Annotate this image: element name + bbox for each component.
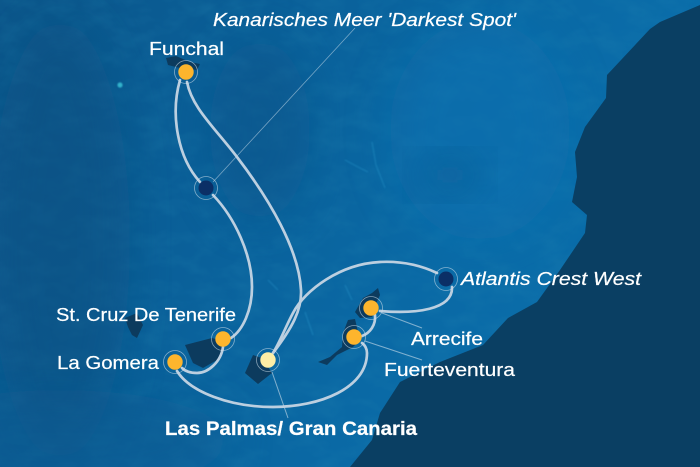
island: Fuerteventura [318,319,360,365]
island: Lanzarote [355,288,380,318]
guide line: Arrecife [382,313,422,328]
label: Atlantis Crest West: Atlantis Crest West [460,268,642,289]
guide line: Fuerteventura [365,341,422,360]
seamount highlights [268,142,385,335]
label: St. Cruz De Tenerife: St. Cruz De Tenerife [56,304,236,325]
label: Fuerteventura: Fuerteventura [384,359,516,380]
island: La Palma [125,313,143,338]
islands [125,56,380,384]
label: Las Palmas / Gran Canaria: Las Palmas/ Gran Canaria [165,419,417,440]
label: La Gomera: La Gomera [57,352,160,373]
landmass: African coast [350,5,700,467]
glow spot [117,82,123,88]
port marker: Las Palmas [256,348,280,372]
label: Kanarisches Meer: Kanarisches Meer 'Darkest Spot' [213,9,518,30]
label: Funchal: Funchal [149,38,224,59]
waypoint marker: Atlantis Crest West [434,268,458,290]
label: Arrecife: Arrecife [411,328,483,349]
island: Tenerife [185,338,226,368]
port marker: La Gomera [164,350,186,374]
guide line: Kanarisches Meer [213,28,355,182]
port marker: Fuerteventura [342,326,366,348]
guide line: Las Palmas [272,372,288,418]
waypoint marker: Kanarisches Meer [194,176,218,200]
island: Madeira [166,56,200,70]
cruise route [176,80,452,407]
island: Gran Canaria [245,355,272,384]
port marker: Arrecife [360,296,382,320]
port marker: Funchal [174,60,198,84]
port marker: St. Cruz De Tenerife [212,328,234,350]
